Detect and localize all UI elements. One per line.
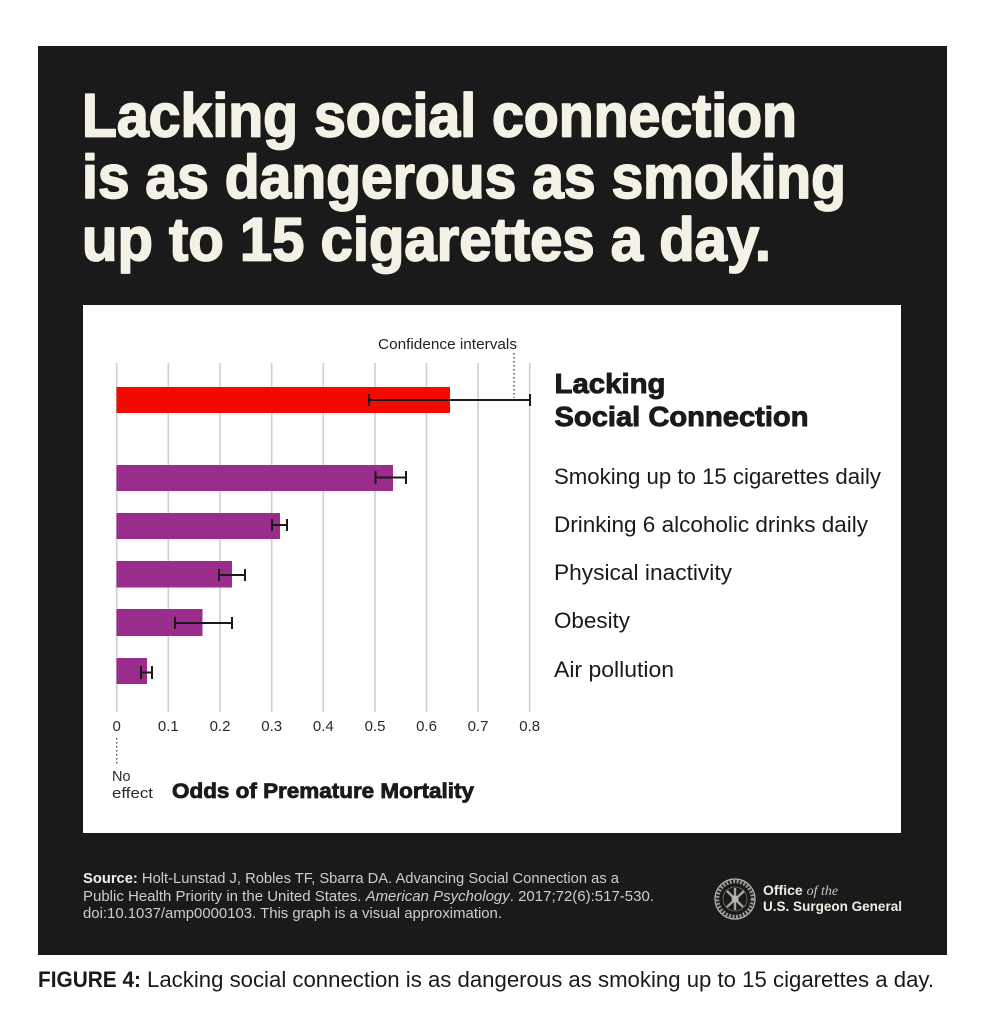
bar: drinking (116, 513, 280, 539)
surgeon general wordmark: U.S. Surgeon General (763, 898, 902, 914)
axis tick labels: 0.7 (468, 718, 488, 735)
source note: Source: Holt-Lunstad J, Robles TF, Sbarra DA. Advancing Social Connection as a (83, 870, 620, 887)
row label: lacking social connection: Lacking (554, 368, 666, 399)
surgeon general wordmark (763, 882, 902, 914)
bar: air pollution (116, 658, 147, 684)
axis tick labels: 0.8 (519, 718, 540, 735)
source note (83, 870, 654, 922)
no effect note (112, 738, 153, 802)
axis tick labels: 0.5 (365, 718, 385, 735)
title: up to 15 cigarettes a day. (82, 206, 771, 274)
icon: surgeon general seal (715, 879, 755, 919)
row labels: Smoking up to 15 cigarettes daily (554, 464, 882, 489)
title: Lacking social connection (82, 82, 797, 150)
row label: lacking social connection: Social Connection (554, 401, 808, 432)
panel: chart card (83, 305, 901, 833)
bar: lacking social connection (116, 387, 450, 413)
row labels: Air pollution (554, 657, 674, 682)
axis tick labels: 0.1 (158, 718, 179, 735)
caption label: FIGURE 4: (38, 967, 141, 992)
figure caption (38, 967, 934, 992)
axis tick labels: 0.3 (261, 718, 282, 735)
axis tick labels: 0.6 (416, 718, 437, 735)
axis tick labels: 0.4 (313, 718, 334, 735)
no effect note: effect (112, 786, 153, 802)
title: is as dangerous as smoking (82, 143, 846, 211)
source note: Public Health Priority in the United States. American Psychology. 2017;72(6):517-530. (83, 888, 654, 905)
axis tick labels (113, 718, 540, 735)
axis tick labels: 0.2 (210, 718, 230, 735)
row labels: Physical inactivity (554, 560, 733, 585)
axis title: Odds of Premature Mortality (172, 779, 474, 803)
no effect note: No (112, 769, 131, 785)
row labels: Drinking 6 alcoholic drinks daily (554, 512, 869, 537)
title (82, 82, 846, 274)
row labels (554, 464, 882, 682)
bar: smoking (116, 465, 393, 491)
source note: doi:10.1037/amp0000103. This graph is a visual approximation. (83, 905, 502, 922)
error bars (141, 394, 530, 679)
confidence intervals callout: Confidence intervals (378, 337, 517, 353)
row labels: Obesity (554, 608, 631, 633)
row label: lacking social connection (554, 368, 808, 432)
surgeon general wordmark: Office of the (763, 882, 838, 899)
confidence intervals callout (378, 337, 517, 398)
bar: obesity (116, 609, 202, 636)
caption text: Lacking social connection is as dangerous as smoking up to 15 cigarettes a day. (147, 967, 934, 992)
axis tick labels: 0 (113, 718, 121, 735)
bar: physical inactivity (116, 561, 232, 588)
